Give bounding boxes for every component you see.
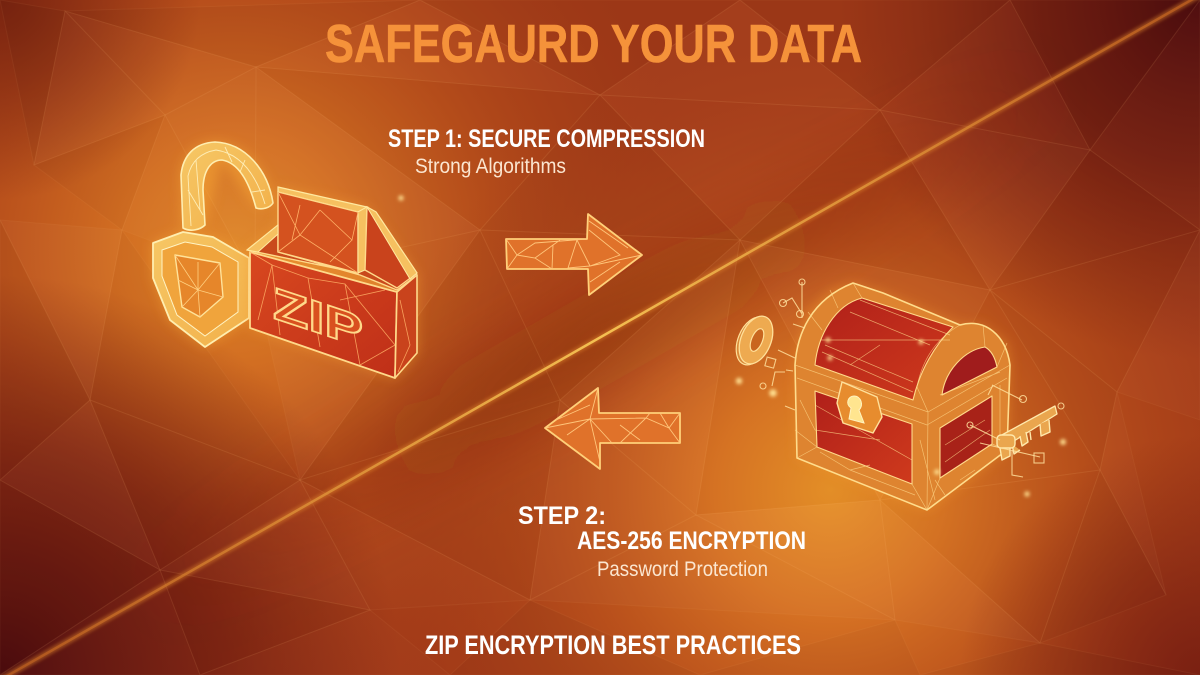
- chest body: [795, 283, 1010, 510]
- shield body: [153, 232, 249, 347]
- keyhole plate: [837, 382, 882, 433]
- flap: [365, 207, 417, 288]
- glow particles: [398, 195, 1066, 497]
- step 1 heading: [388, 125, 705, 178]
- front lower panel: [815, 391, 912, 484]
- icon: treasure chest with key: [398, 195, 1066, 510]
- step 1 subtitle: Strong Algorithms: [415, 155, 566, 178]
- icon: open padlock with shield: [153, 142, 273, 347]
- step 2 title: AES-256 ENCRYPTION: [577, 527, 806, 555]
- step 2 heading: [518, 502, 806, 581]
- step 2 heading: STEP 2:: [518, 502, 606, 530]
- key: [997, 406, 1057, 460]
- arrow: right: [506, 214, 642, 295]
- icon: ZIP folder box: [247, 187, 417, 378]
- circuit nodes: [760, 279, 1064, 477]
- padlock shackle: [181, 142, 273, 230]
- lid panel: [815, 298, 953, 400]
- ZIP lettering: ZIP: [273, 277, 363, 357]
- box inner back: [247, 207, 417, 290]
- side arch panel: [942, 347, 997, 395]
- side lower panel: [940, 396, 992, 478]
- footer caption: ZIP ENCRYPTION BEST PRACTICES: [425, 630, 801, 660]
- step 2 subtitle: Password Protection: [597, 558, 768, 581]
- lock disc: [730, 311, 779, 370]
- title: SAFEGAURD YOUR DATA: [325, 14, 862, 74]
- paper sheet: [278, 187, 367, 273]
- arrow: left: [545, 388, 680, 469]
- step 1 heading: STEP 1: SECURE COMPRESSION: [388, 125, 705, 153]
- box front panel: [250, 252, 417, 378]
